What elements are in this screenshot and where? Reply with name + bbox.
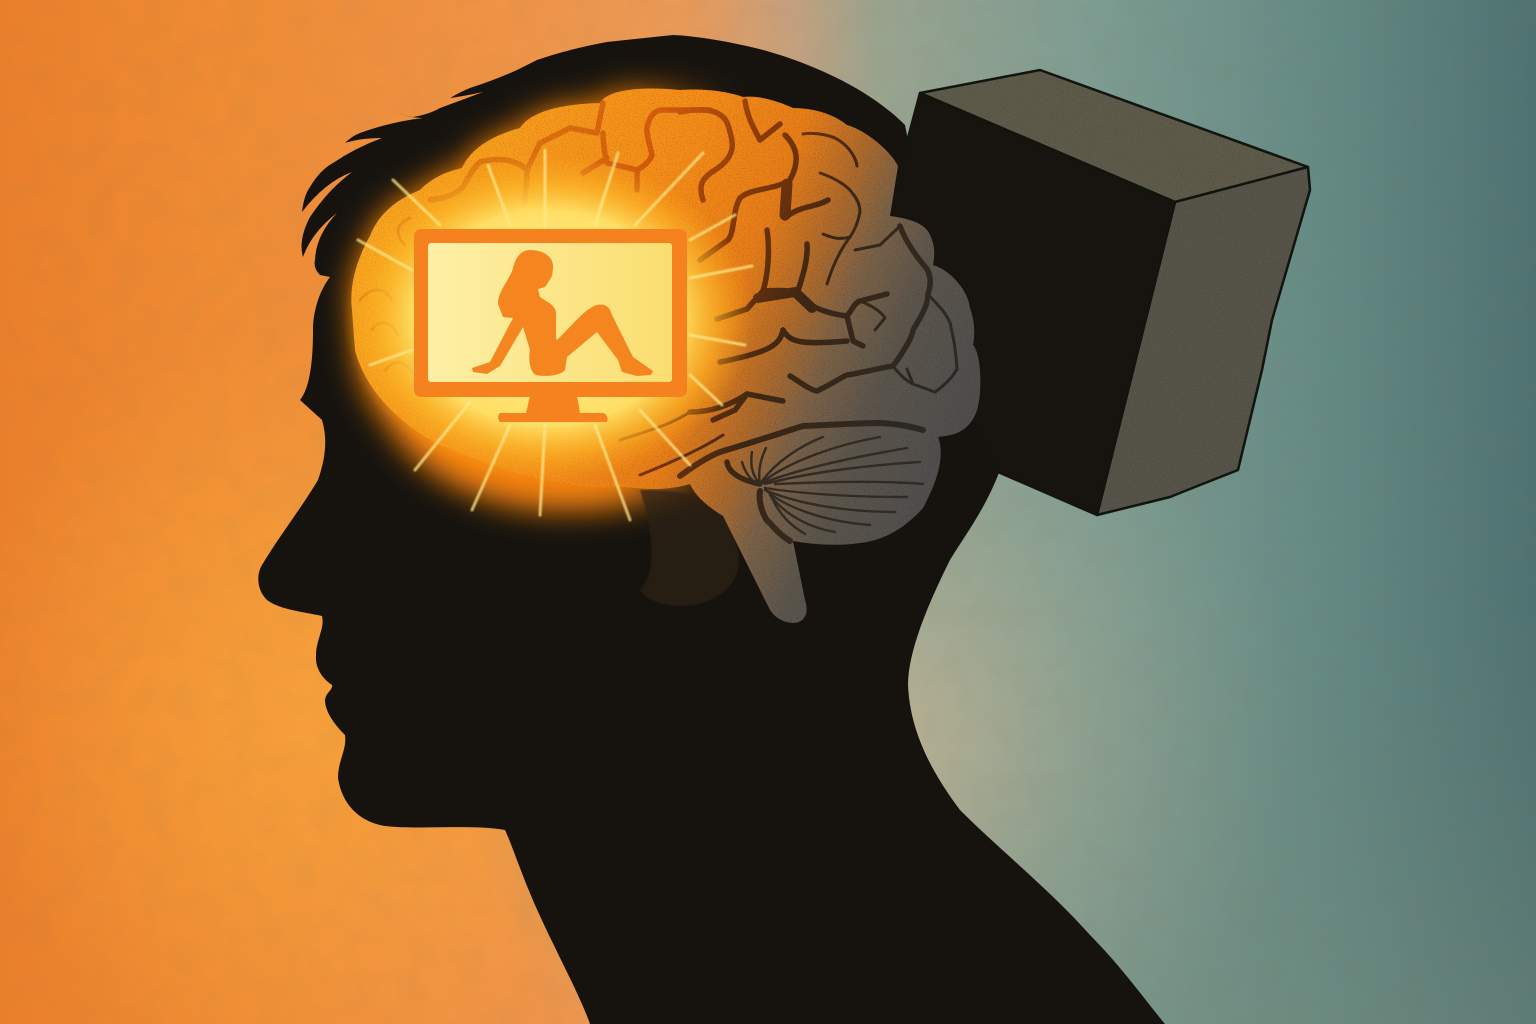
block: right face (1097, 167, 1310, 515)
brain folds: thick sulci (430, 101, 930, 541)
brain shape (351, 89, 980, 623)
seated figure silhouette (472, 250, 653, 376)
lower temporal shadow shape (640, 490, 739, 606)
monitor stand (498, 396, 608, 422)
monitor screen (428, 243, 672, 382)
monitor frame (414, 229, 687, 397)
glow halo on head (351, 89, 730, 511)
brain (340, 80, 990, 630)
cerebellum (742, 437, 923, 534)
head silhouette (258, 35, 1165, 1024)
brain folds: fine sulci (360, 133, 957, 475)
light rays (358, 150, 752, 520)
concrete block (888, 70, 1312, 516)
block: top face (920, 70, 1308, 202)
block: dark left face (888, 93, 1175, 515)
stipple grain on brain (340, 80, 990, 630)
computer monitor (414, 229, 687, 422)
block: surface speckle (920, 70, 1312, 516)
central glow (343, 153, 753, 483)
